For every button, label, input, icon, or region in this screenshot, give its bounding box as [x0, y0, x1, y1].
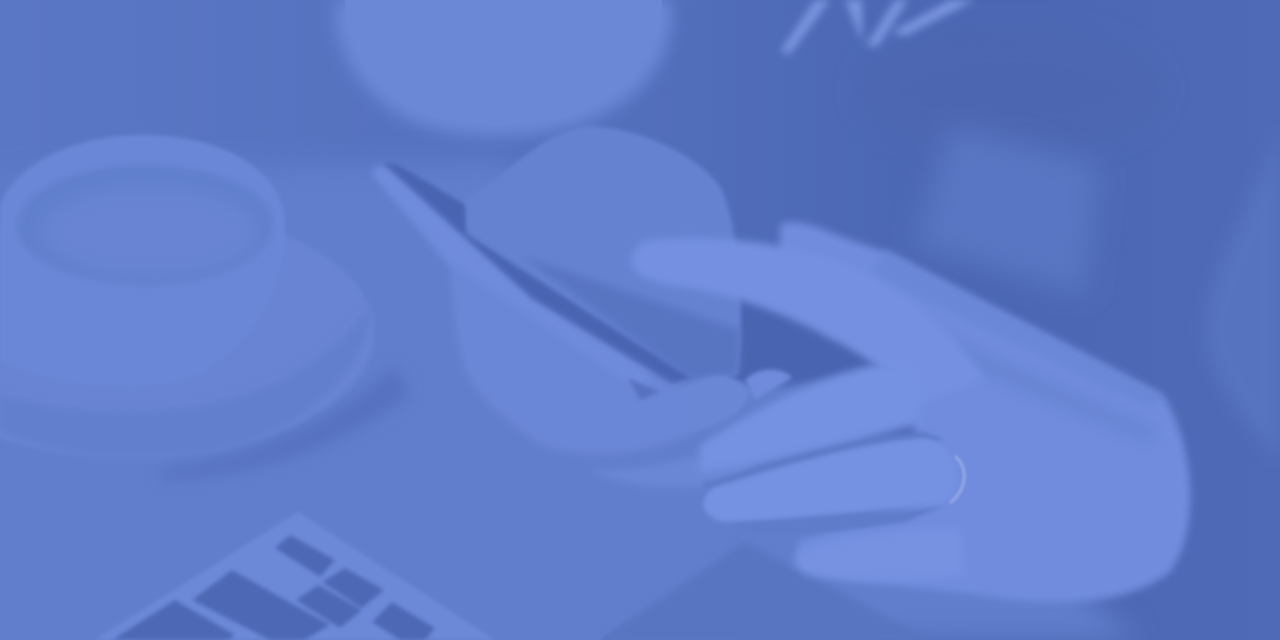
- index finger: [632, 238, 985, 400]
- keyboard laptop: [95, 512, 495, 640]
- sleeve folds: [870, 250, 1165, 408]
- gap under ring finger: [730, 506, 945, 534]
- back of hand: [780, 222, 1190, 602]
- phone screen dark edge: [382, 163, 690, 385]
- key: [192, 570, 330, 640]
- desk surface: [0, 160, 1140, 640]
- key: [296, 585, 362, 628]
- coffee cup: [0, 135, 285, 386]
- saucer: [0, 206, 375, 458]
- key: [112, 600, 235, 640]
- key: [275, 535, 335, 577]
- middle finger: [700, 362, 923, 472]
- mug top fill: [345, 0, 662, 125]
- dark shadow behind fingers: [730, 290, 880, 385]
- desk lower fill: [0, 300, 760, 640]
- palm and phone body: [372, 166, 792, 454]
- far hand fingers behind phone: [465, 126, 741, 380]
- dark upper right wash: [860, 30, 1160, 150]
- gap between fingers: [700, 432, 945, 490]
- ring finger: [704, 438, 957, 522]
- blurred plant leaves: [780, 0, 975, 54]
- blurred object right: [915, 125, 1100, 295]
- key: [372, 602, 435, 640]
- saucer shadow: [160, 365, 410, 480]
- blurred shape at right edge: [1205, 130, 1280, 460]
- little finger: [794, 528, 965, 580]
- smartphone: [382, 163, 690, 385]
- blurred mug in background: [335, 0, 672, 136]
- middle finger base shadow: [590, 425, 790, 487]
- key: [322, 568, 384, 608]
- ring: [950, 456, 964, 503]
- desk lower area: [600, 542, 930, 640]
- near hand with pointing finger: [590, 222, 1190, 602]
